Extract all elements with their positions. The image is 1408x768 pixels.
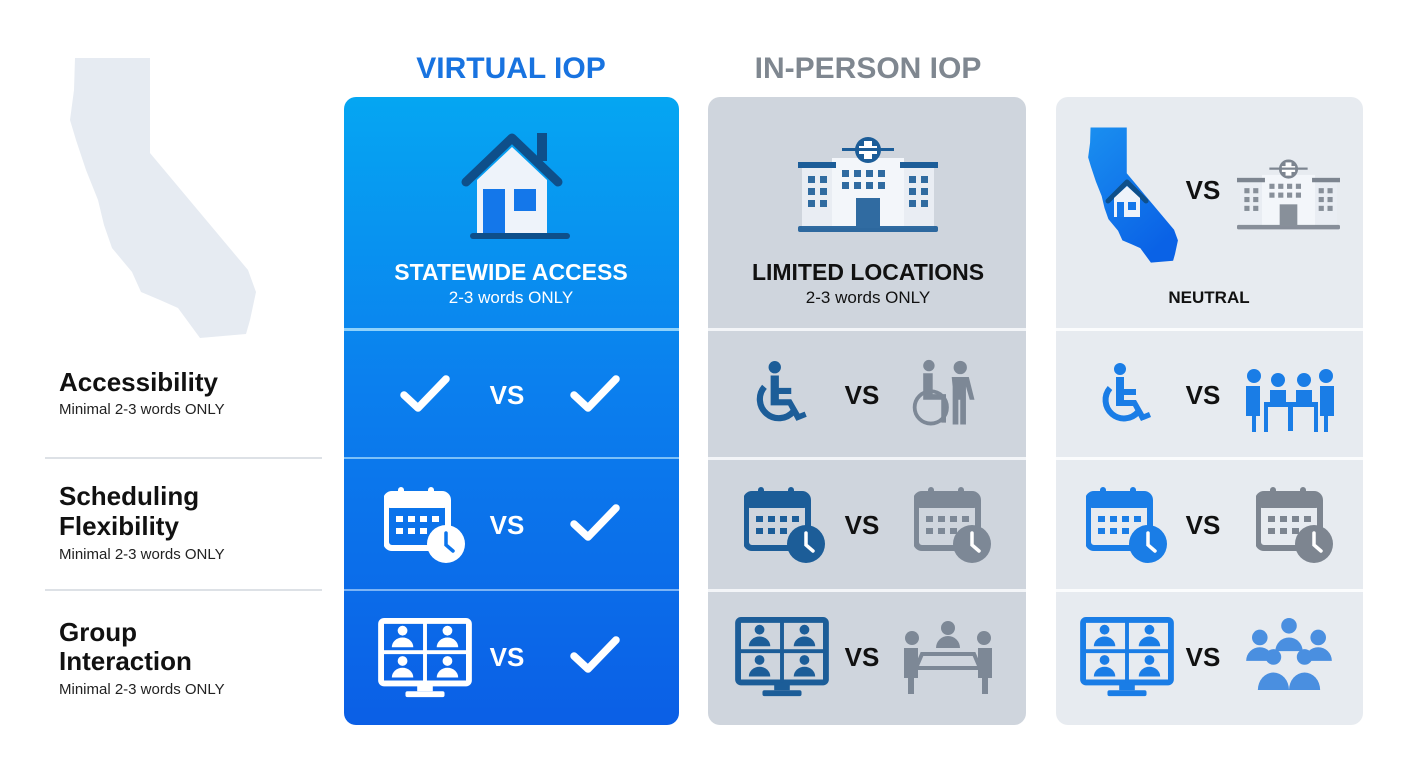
row: group virtual: VS: [490, 642, 524, 672]
row label: scheduling flexibility: Scheduling: [59, 481, 199, 511]
icon: house: [466, 133, 570, 239]
row: scheduling neutral: [1088, 487, 1333, 563]
row: scheduling virtual: VS: [490, 510, 524, 540]
row: accessibility neutral: [1106, 363, 1334, 432]
row: accessibility virtual: [404, 379, 616, 410]
panel: neutral: [1056, 97, 1363, 725]
row: scheduling in-person: VS: [845, 510, 879, 540]
row label: group interaction: [59, 617, 225, 698]
row label: accessibility: [59, 367, 225, 418]
row: accessibility neutral: VS: [1186, 380, 1220, 410]
text: neutral: NEUTRAL: [1168, 288, 1250, 307]
text: statewide access: STATEWIDE ACCESS: [394, 259, 628, 285]
row: group neutral: [1083, 618, 1332, 696]
row: accessibility virtual: VS: [490, 380, 524, 410]
header: virtual IOP: VIRTUAL IOP: [416, 52, 606, 85]
california map background: [70, 58, 256, 338]
row label: accessibility: Accessibility: [59, 367, 219, 397]
icon: hospital: [798, 137, 938, 232]
row label: group interaction: Group: [59, 617, 137, 647]
row: group in-person: VS: [845, 642, 879, 672]
text: limited locations: LIMITED LOCATIONS: [752, 259, 984, 285]
row: group neutral: VS: [1186, 642, 1220, 672]
panel: in-person IOP: [708, 97, 1026, 725]
panel: in-person IOP: 2-3 words ONLY: [806, 288, 930, 307]
row label: accessibility: Minimal 2-3 words ONLY: [59, 401, 225, 418]
panel: virtual IOP: [344, 97, 679, 725]
row label: group interaction: Interaction: [59, 646, 192, 676]
panel: virtual IOP: 2-3 words ONLY: [449, 288, 573, 307]
icon: california with house: [1088, 127, 1178, 263]
row: scheduling neutral: VS: [1186, 510, 1220, 540]
row: group in-person: [738, 620, 992, 696]
header: in-person IOP: IN-PERSON IOP: [755, 52, 981, 85]
row label: group interaction: Minimal 2-3 words ONLY: [59, 681, 225, 698]
row label: scheduling flexibility: [59, 481, 225, 563]
row label: scheduling flexibility: Minimal 2-3 words ONLY: [59, 546, 225, 563]
row: scheduling in-person: [746, 487, 991, 563]
panel: neutral: VS: [1186, 175, 1220, 205]
row: accessibility in-person: [760, 360, 974, 424]
row: scheduling virtual: [386, 487, 616, 563]
row label: scheduling flexibility: Flexibility: [59, 511, 179, 541]
row: accessibility in-person: VS: [845, 380, 879, 410]
icon: gray hospital: [1237, 159, 1340, 229]
row: group virtual: [381, 621, 616, 697]
